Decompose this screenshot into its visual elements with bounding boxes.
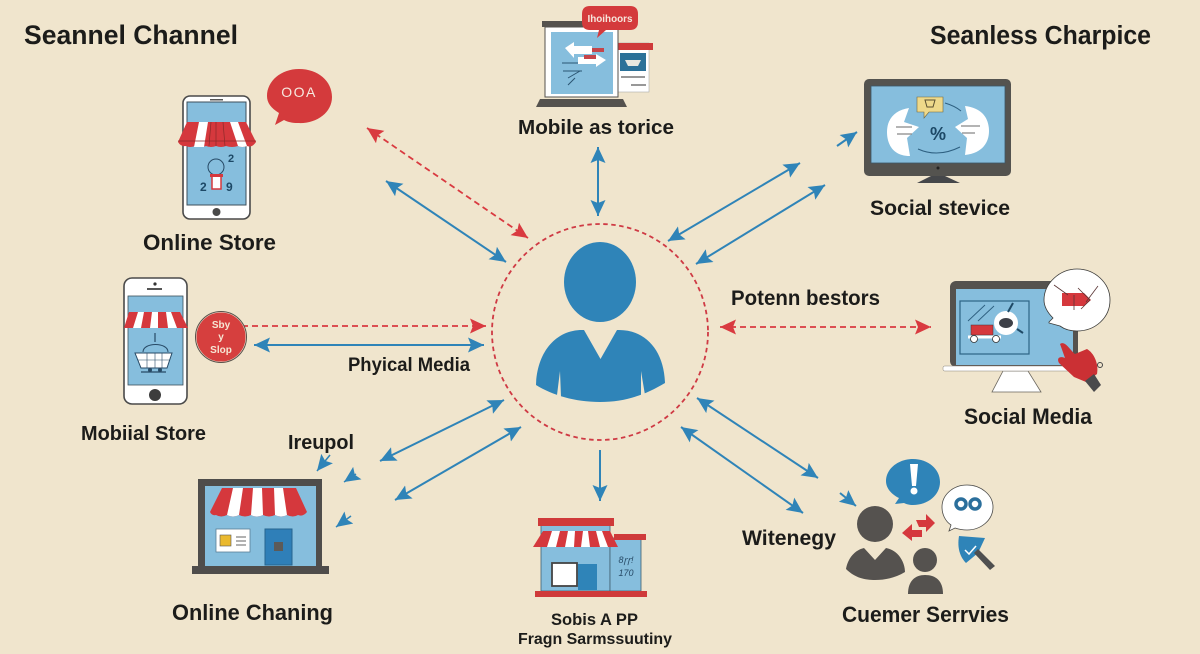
arrow: red dashed upper left bbox=[367, 128, 528, 238]
arrow: blue upper left bbox=[386, 181, 506, 262]
label: Online Store: Online Store bbox=[143, 230, 276, 255]
label: Potenn bestors: Potenn bestors bbox=[731, 287, 880, 310]
icon: online store phone: 2 bbox=[200, 180, 207, 194]
title: left heading: Seannel Channel bbox=[24, 20, 238, 50]
icon: small shop: 8ꞅꞅ! bbox=[619, 555, 634, 566]
icon: red badge Sby y Slop bbox=[196, 312, 246, 362]
label: Witenegy: Witenegy bbox=[742, 527, 836, 550]
label: Online Chaning: Online Chaning bbox=[172, 600, 333, 625]
icon: red badge Sby y Slop: Slop bbox=[210, 345, 232, 356]
label: Social stevice: Social stevice bbox=[870, 197, 1010, 220]
label: Sobis A PP: Sobis A PP bbox=[551, 610, 638, 629]
icon: online store phone: 9 bbox=[226, 180, 233, 194]
label: Cuemer Serrvies: Cuemer Serrvies bbox=[842, 602, 1009, 627]
icon: social media monitor bbox=[943, 269, 1110, 392]
label: Ireupol: Ireupol bbox=[288, 432, 354, 454]
arrow: small blue to customer icon bbox=[840, 493, 856, 506]
label: Mobiial Store: Mobiial Store bbox=[81, 423, 206, 445]
arrow: red dashed right bbox=[720, 326, 931, 328]
arrow: blue top vertical bbox=[597, 147, 599, 216]
icon: top laptop with document bbox=[536, 6, 653, 107]
icon: desktop monitor with percent bbox=[864, 79, 1011, 183]
icon: mobile cart phone bbox=[124, 278, 188, 404]
icon: desktop monitor with percent: % bbox=[930, 124, 946, 144]
icon: small shop: 170 bbox=[618, 568, 634, 578]
arrow: blue upper right two bbox=[696, 185, 825, 264]
icon: small shop bbox=[533, 518, 647, 597]
arrow: blue lower right one bbox=[697, 398, 818, 478]
label: Phyical Media: Phyical Media bbox=[348, 355, 470, 376]
arrow: blue lower left one bbox=[380, 400, 504, 461]
icon: red badge Sby y Slop: y bbox=[218, 332, 224, 343]
arrow: blue upper right one bbox=[668, 163, 800, 241]
label: Mobile as torice: Mobile as torice bbox=[518, 116, 674, 139]
arrow: blue lower left two bbox=[395, 427, 521, 500]
label: Fragn Sarmssuutiny: Fragn Sarmssuutiny bbox=[518, 631, 672, 648]
icon: laptop storefront bbox=[192, 479, 329, 574]
arrow: small blue left middle bbox=[344, 474, 356, 482]
arrow: blue left horizontal bbox=[254, 344, 484, 346]
icon: customer service group bbox=[846, 459, 995, 594]
icon: top laptop with document: Ihoihoors bbox=[588, 14, 633, 25]
icon: online store phone: 2 bbox=[228, 153, 234, 165]
arrow: blue lower right two bbox=[681, 427, 803, 513]
arrow: small blue under Ireupol bbox=[317, 455, 330, 471]
arrow: red dashed left bbox=[232, 325, 486, 327]
icon: speech bubble OOA bbox=[267, 69, 332, 125]
label: Social Media: Social Media bbox=[964, 404, 1093, 429]
icon: online store phone bbox=[178, 96, 256, 219]
arrow: blue bottom vertical bbox=[599, 450, 601, 501]
title: right heading: Seanless Charpice bbox=[930, 22, 1151, 50]
center customer node bbox=[492, 224, 708, 440]
icon: red badge Sby y Slop: Sby bbox=[212, 320, 231, 331]
arrow: small blue left lower bbox=[336, 516, 351, 527]
icon: speech bubble OOA: OOA bbox=[281, 84, 317, 100]
arrow: small blue to monitor bbox=[837, 132, 857, 146]
